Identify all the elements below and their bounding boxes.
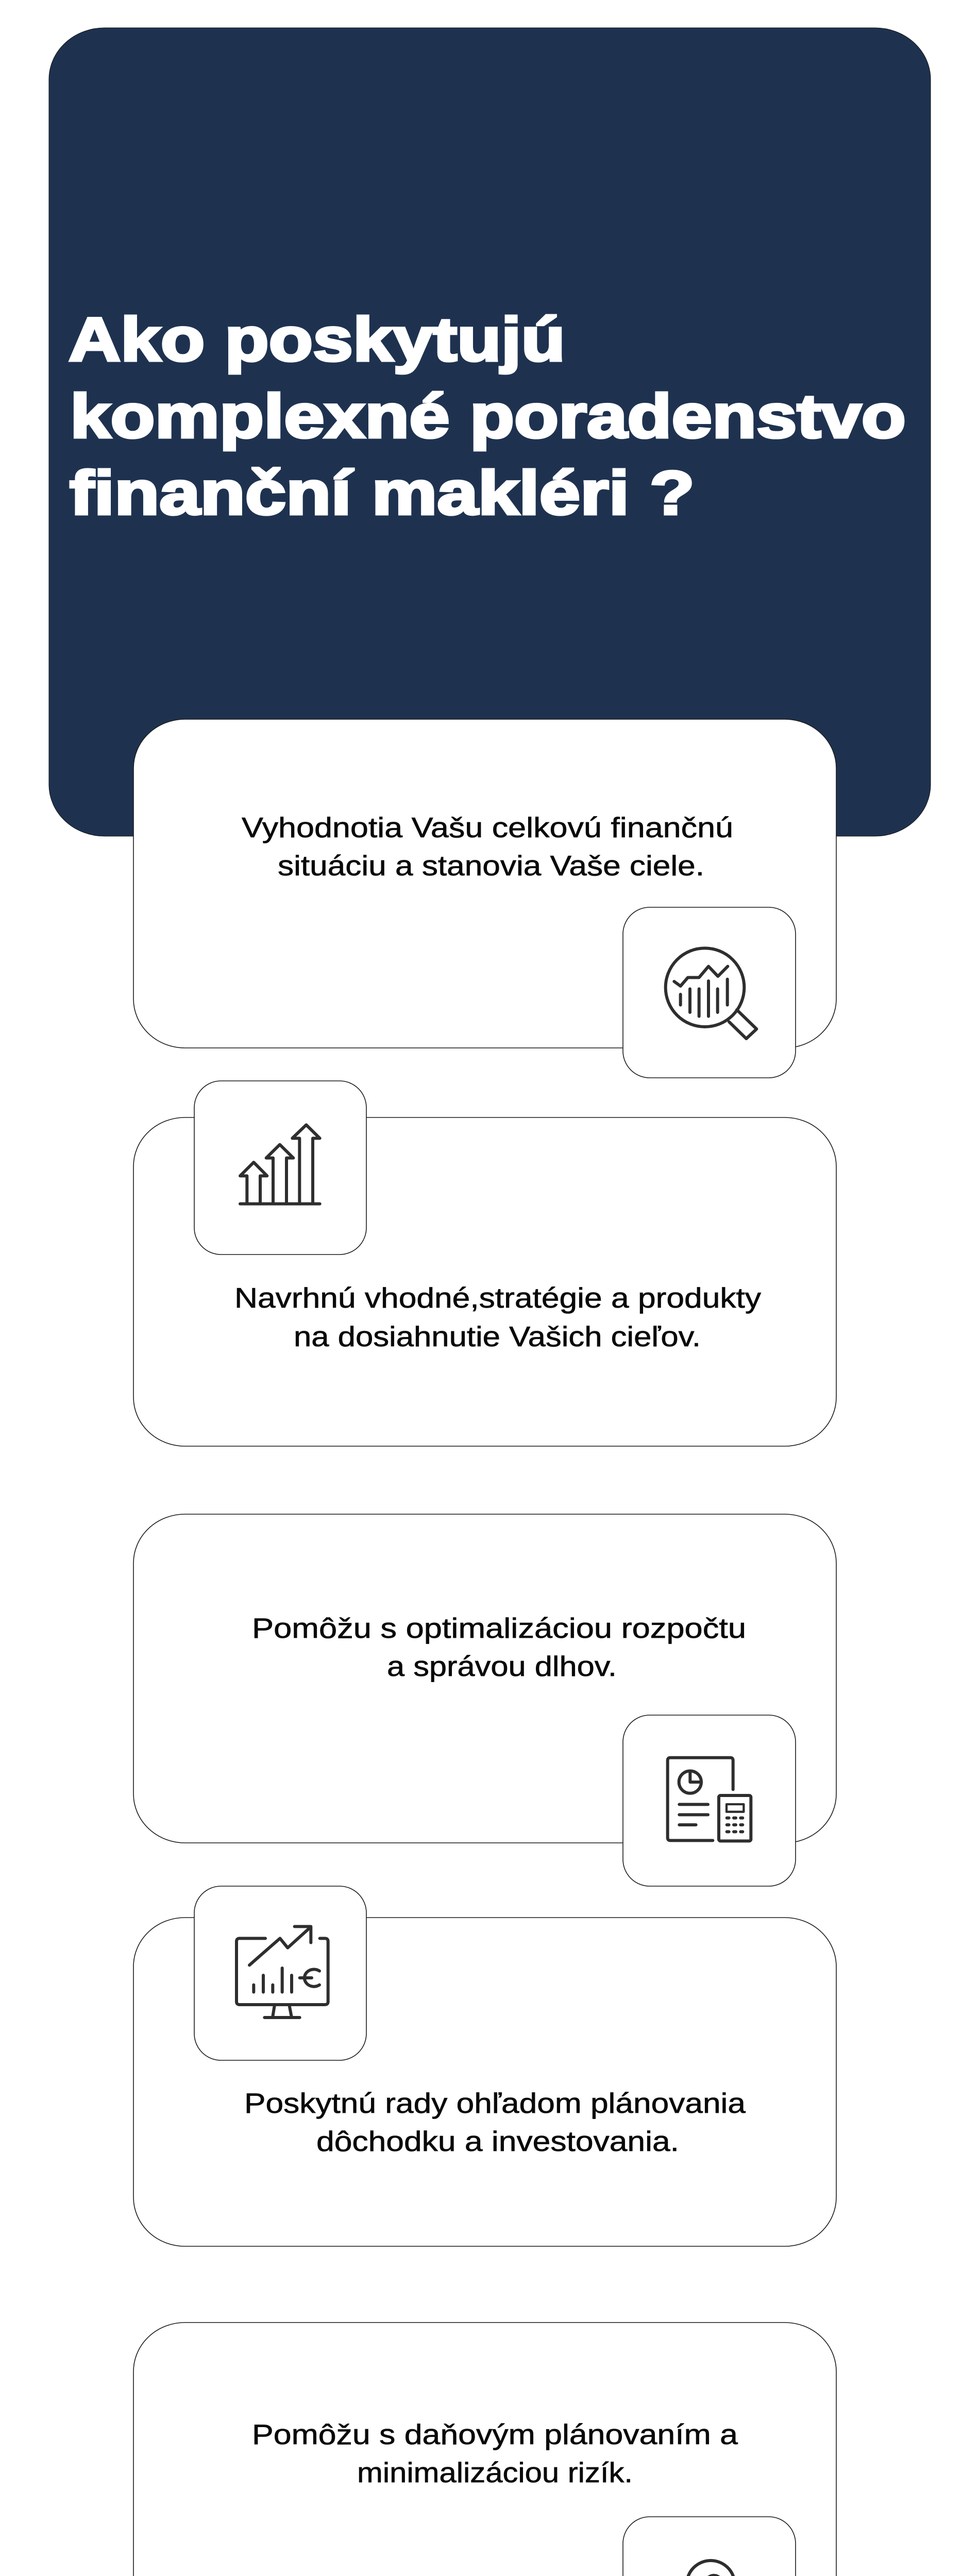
text: card 2: Navrhnú vhodné,stratégie a produkty bbox=[234, 1282, 762, 1314]
panel: card 2 bbox=[133, 1117, 836, 1446]
text: card 1: situáciu a stanovia Vaše ciele. bbox=[278, 850, 704, 882]
icon box: monitor with growth chart and euro bbox=[194, 1886, 366, 2060]
text: card 3: Pomôžu s optimalizáciou rozpočtu bbox=[252, 1612, 746, 1644]
text: card 4: dôchodku a investovania. bbox=[316, 2125, 679, 2157]
text: card 4 bbox=[244, 2087, 746, 2157]
title bbox=[69, 305, 906, 528]
panel: card 5 bbox=[133, 2323, 836, 2576]
icon box: euro plant bbox=[623, 2517, 796, 2576]
panel: card 3 bbox=[133, 1514, 836, 1843]
title: Ako poskytujú bbox=[69, 305, 565, 374]
text: card 1: Vyhodnotia Vašu celkovú finančnú bbox=[242, 811, 733, 843]
title: finanční makléri ? bbox=[70, 459, 695, 528]
icon box: rising arrows bbox=[194, 1081, 366, 1255]
title: komplexné poradenstvo bbox=[70, 382, 906, 451]
text: card 1 bbox=[242, 811, 733, 882]
text: card 3: a správou dlhov. bbox=[387, 1650, 617, 1682]
text: card 5: Pomôžu s daňovým plánovaním a bbox=[252, 2418, 738, 2450]
icon box: magnifier with chart bbox=[623, 907, 796, 1078]
panel: navy header bbox=[49, 28, 931, 836]
text: card 3 bbox=[252, 1612, 746, 1682]
panel: card 4 bbox=[133, 1918, 836, 2246]
text: card 2: na dosiahnutie Vašich cieľov. bbox=[294, 1320, 701, 1352]
icon box: report and calculator bbox=[623, 1715, 796, 1886]
text: card 5 bbox=[252, 2418, 738, 2488]
text: card 4: Poskytnú rady ohľadom plánovania bbox=[244, 2087, 746, 2119]
text: card 5: minimalizáciou rizík. bbox=[357, 2456, 633, 2488]
text: card 2 bbox=[234, 1282, 762, 1352]
panel: card 1 bbox=[133, 719, 836, 1048]
